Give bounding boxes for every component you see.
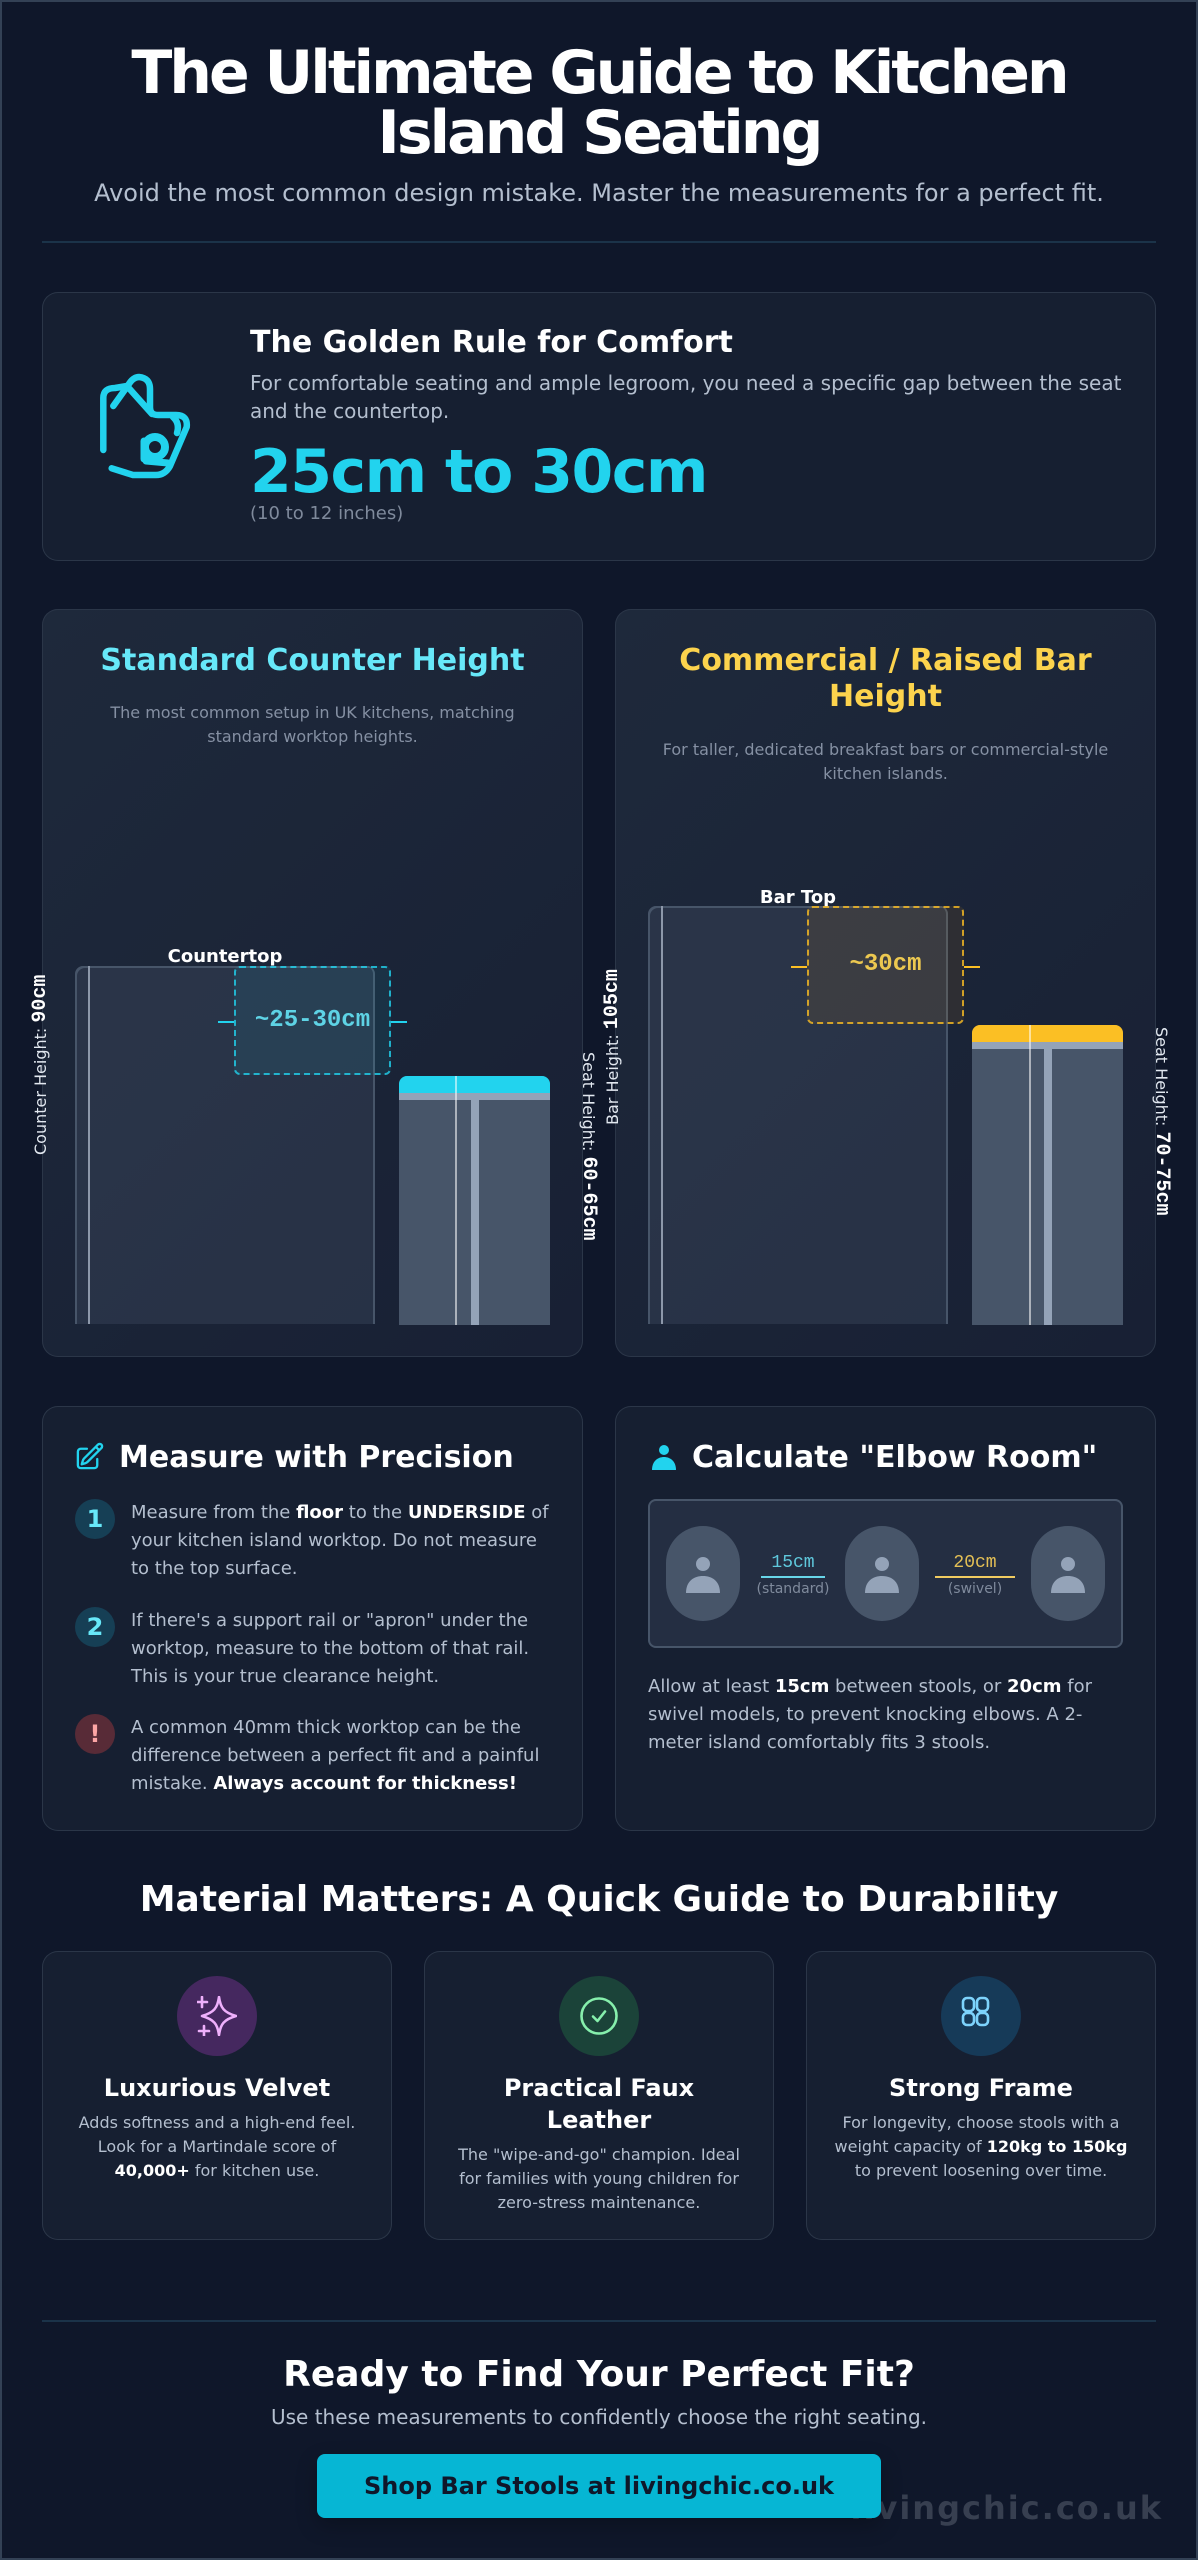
golden rule text xyxy=(250,371,1121,423)
stool 2 xyxy=(845,1526,919,1621)
faux leather title xyxy=(504,2074,694,2134)
card: strong frame xyxy=(806,1951,1156,2240)
cta button xyxy=(317,2454,881,2518)
warning text xyxy=(131,1717,539,1794)
spacing 20cm: 20cm xyxy=(953,1553,997,1573)
bar height label: Bar Height: 105cm xyxy=(601,969,624,1125)
title: Island Seating xyxy=(378,98,820,168)
step 1 text: to the top surface. xyxy=(131,1558,298,1579)
bar heading: Height xyxy=(829,679,942,714)
spacing line 20cm xyxy=(935,1576,1015,1578)
golden rule text: and the countertop. xyxy=(250,399,449,423)
step 1 badge xyxy=(75,1499,115,1539)
panel: measure with precision xyxy=(42,1406,583,1831)
bar heading: Commercial / Raised Bar xyxy=(679,643,1092,678)
step 1 text: your kitchen island worktop. Do not measure xyxy=(131,1530,537,1551)
standard description: The most common setup in UK kitchens, matching xyxy=(110,703,515,722)
elbow text: Allow at least 15cm between stools, or 20cm for xyxy=(648,1676,1092,1697)
step 2 text: This is your true clearance height. xyxy=(131,1666,439,1687)
golden rule inches: (10 to 12 inches) xyxy=(250,503,403,524)
bar block xyxy=(648,906,948,1324)
header divider xyxy=(42,241,1156,243)
strong frame text: weight capacity of 120kg to 150kg xyxy=(835,2137,1127,2156)
bar description xyxy=(663,740,1108,783)
warning text: difference between a perfect fit and a painful xyxy=(131,1745,539,1766)
step 2 text xyxy=(130,1610,529,1687)
icon: check circle xyxy=(559,1976,639,2056)
velvet text: Look for a Martindale score of xyxy=(98,2137,336,2156)
counter height label: Counter Height: 90cm xyxy=(29,975,52,1155)
bar top label: Bar Top xyxy=(760,887,836,908)
spacing line 15cm xyxy=(761,1576,825,1578)
call to action xyxy=(42,2320,1163,2527)
velvet text: 40,000+ for kitchen use. xyxy=(115,2161,319,2180)
golden rule heading: The Golden Rule for Comfort xyxy=(250,325,733,360)
faux leather text: for families with young children for xyxy=(459,2169,739,2188)
spacing 15cm: 15cm xyxy=(771,1553,815,1573)
bar tick left xyxy=(791,966,807,968)
card: faux leather xyxy=(424,1951,774,2240)
stool 1 xyxy=(666,1526,740,1621)
materials heading: Material Matters: A Quick Guide to Durability xyxy=(140,1879,1058,1920)
standard description xyxy=(110,703,515,746)
counter block xyxy=(75,966,375,1324)
icon: pencil square xyxy=(76,1442,104,1470)
bar description: kitchen islands. xyxy=(823,764,948,783)
velvet title: Luxurious Velvet xyxy=(104,2074,330,2102)
bar heading xyxy=(679,643,1092,714)
panel: elbow room xyxy=(615,1406,1156,1831)
faux leather text: The "wipe-and-go" champion. Ideal xyxy=(458,2145,740,2164)
bar gap box xyxy=(807,906,964,1024)
gap box: ~25-30cm xyxy=(255,1007,370,1034)
golden rule measurement: 25cm to 30cm xyxy=(250,437,707,507)
icon: frame squares xyxy=(941,1976,1021,2056)
warning badge: ! xyxy=(90,1720,100,1748)
title: The Ultimate Guide to Kitchen xyxy=(131,38,1067,108)
faux leather title: Practical Faux xyxy=(504,2074,694,2102)
countertop label: Countertop xyxy=(168,946,282,967)
title xyxy=(131,38,1067,168)
step 1 badge: 1 xyxy=(87,1505,103,1533)
faux leather text: zero-stress maintenance. xyxy=(498,2193,700,2212)
step 1 text xyxy=(131,1502,549,1579)
icon: sparkles xyxy=(177,1976,257,2056)
elbow heading: Calculate "Elbow Room" xyxy=(692,1440,1097,1475)
bar description: For taller, dedicated breakfast bars or commercial-style xyxy=(663,740,1108,759)
step 2 badge: 2 xyxy=(87,1613,103,1641)
measure heading: Measure with Precision xyxy=(119,1440,514,1475)
standard label: (standard) xyxy=(756,1581,830,1597)
strong frame text: to prevent loosening over time. xyxy=(855,2161,1107,2180)
faux leather text xyxy=(458,2145,740,2212)
seat height label: Seat Height: 60-65cm xyxy=(577,1052,600,1241)
subtitle: Avoid the most common design mistake. Master the measurements for a perfect fit. xyxy=(94,179,1104,207)
bar seat height label: Seat Height: 70-75cm xyxy=(1150,1027,1173,1216)
bar tick right xyxy=(964,966,980,968)
gap tick right xyxy=(391,1021,407,1023)
golden rule text: For comfortable seating and ample legroom, you need a specific gap between the seat xyxy=(250,371,1121,395)
elbow text: swivel models, to prevent knocking elbows. A 2- xyxy=(648,1704,1082,1725)
strong frame text: For longevity, choose stools with a xyxy=(843,2113,1119,2132)
icon: person xyxy=(652,1445,676,1470)
elbow text: meter island comfortably fits 3 stools. xyxy=(648,1732,990,1753)
warning text: mistake. Always account for thickness! xyxy=(131,1773,517,1794)
card: velvet xyxy=(42,1951,392,2240)
bar stool xyxy=(972,1025,1123,1325)
icon: hand xyxy=(100,374,190,478)
standard description: standard worktop heights. xyxy=(207,727,418,746)
panel: raised bar height xyxy=(615,609,1156,1357)
stool xyxy=(399,1076,550,1325)
swivel label: (swivel) xyxy=(948,1581,1002,1597)
velvet text: Adds softness and a high-end feel. xyxy=(79,2113,355,2132)
cta button: Shop Bar Stools at livingchic.co.uk xyxy=(364,2472,834,2500)
stool 3 xyxy=(1031,1526,1105,1621)
strong frame text xyxy=(835,2113,1127,2180)
faux leather title: Leather xyxy=(547,2106,651,2134)
elbow text xyxy=(648,1676,1092,1753)
watermark: livingchic.co.uk xyxy=(851,2489,1163,2527)
standard heading: Standard Counter Height xyxy=(100,643,525,678)
header xyxy=(42,38,1156,243)
step 2 text: worktop, measure to the bottom of that rail. xyxy=(131,1638,529,1659)
panel: standard counter height xyxy=(42,609,583,1357)
warning badge xyxy=(75,1714,115,1754)
gap box xyxy=(234,966,391,1075)
step 1 text: Measure from the floor to the UNDERSIDE of xyxy=(131,1502,549,1523)
gap tick left xyxy=(218,1021,234,1023)
step 2 text: If there's a support rail or "apron" under the xyxy=(131,1610,528,1631)
warning text: A common 40mm thick worktop can be the xyxy=(131,1717,521,1738)
bar gap box: ~30cm xyxy=(849,951,922,978)
stool spacing diagram xyxy=(648,1499,1123,1648)
cta subtext: Use these measurements to confidently choose the right seating. xyxy=(271,2405,927,2429)
step 2 badge xyxy=(75,1607,115,1647)
cta heading: Ready to Find Your Perfect Fit? xyxy=(283,2354,915,2395)
strong frame title: Strong Frame xyxy=(889,2074,1073,2102)
footer divider xyxy=(42,2320,1156,2322)
velvet text xyxy=(78,2113,355,2180)
panel: golden rule xyxy=(42,292,1156,561)
